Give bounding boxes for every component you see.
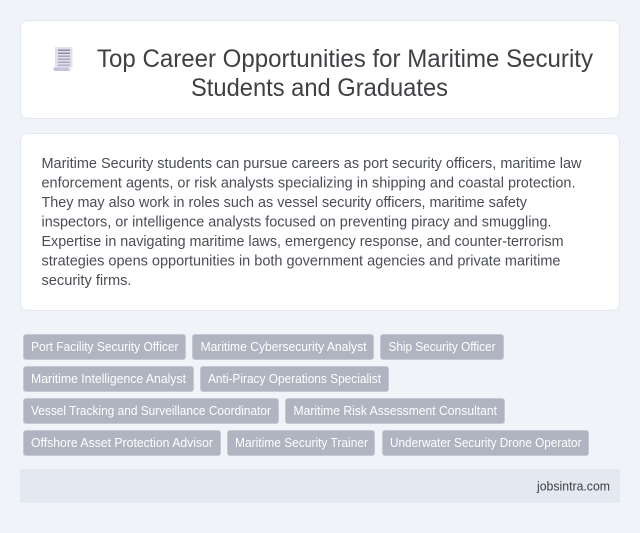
tag: Maritime Risk Assessment Consultant	[286, 398, 504, 424]
footer credit: jobsintra.com	[536, 480, 610, 494]
description text: enforcement agents, or risk analysts specializing in shipping and coastal protection.	[42, 174, 576, 192]
tag: Maritime Intelligence Analyst	[24, 366, 194, 392]
tag: Port Facility Security Officer	[24, 334, 186, 360]
tag: Maritime Cybersecurity Analyst: Maritime Cybersecurity Analyst	[200, 340, 367, 354]
title	[97, 45, 593, 102]
description text: Expertise in navigating maritime laws, emergency response, and counter-terrorism	[42, 233, 564, 250]
tag: Maritime Cybersecurity Analyst	[192, 334, 374, 360]
tag: Vessel Tracking and Surveillance Coordinator: Vessel Tracking and Surveillance Coordinator	[31, 404, 271, 418]
tag: Maritime Risk Assessment Consultant: Maritime Risk Assessment Consultant	[294, 404, 498, 418]
tag: Offshore Asset Protection Advisor	[24, 430, 220, 456]
title: Students and Graduates	[191, 74, 448, 102]
tag: Underwater Security Drone Operator: Underwater Security Drone Operator	[390, 436, 582, 450]
tag list	[24, 334, 588, 456]
tag: Anti-Piracy Operations Specialist	[200, 366, 388, 392]
tag: Maritime Security Trainer	[228, 430, 374, 456]
description text: Maritime Security students can pursue careers as port security officers, maritime law	[42, 155, 582, 172]
description text: strategies opens opportunities in both government agencies and private maritime	[42, 252, 560, 270]
panel: description	[20, 134, 620, 310]
title: Top Career Opportunities for Maritime Security	[97, 45, 593, 73]
footer	[20, 469, 620, 503]
icon: document scroll	[53, 47, 72, 71]
tag: Port Facility Security Officer: Port Facility Security Officer	[31, 340, 178, 354]
description text	[42, 155, 582, 289]
tag: Anti-Piracy Operations Specialist: Anti-Piracy Operations Specialist	[208, 372, 381, 386]
tag: Ship Security Officer: Ship Security Officer	[388, 340, 496, 354]
tag: Maritime Security Trainer: Maritime Security Trainer	[235, 436, 368, 450]
description text: inspectors, or intelligence analysts focused on preventing piracy and smuggling.	[42, 214, 552, 230]
tag: Underwater Security Drone Operator	[382, 430, 588, 456]
tag: Offshore Asset Protection Advisor: Offshore Asset Protection Advisor	[31, 436, 213, 450]
description text: security firms.	[42, 272, 132, 289]
tag: Maritime Intelligence Analyst: Maritime Intelligence Analyst	[31, 372, 187, 386]
tag: Vessel Tracking and Surveillance Coordinator	[24, 398, 278, 424]
tag: Ship Security Officer	[380, 334, 504, 360]
description text: They may also work in roles such as vessel security officers, maritime safety	[42, 194, 527, 211]
panel: header	[20, 20, 620, 118]
